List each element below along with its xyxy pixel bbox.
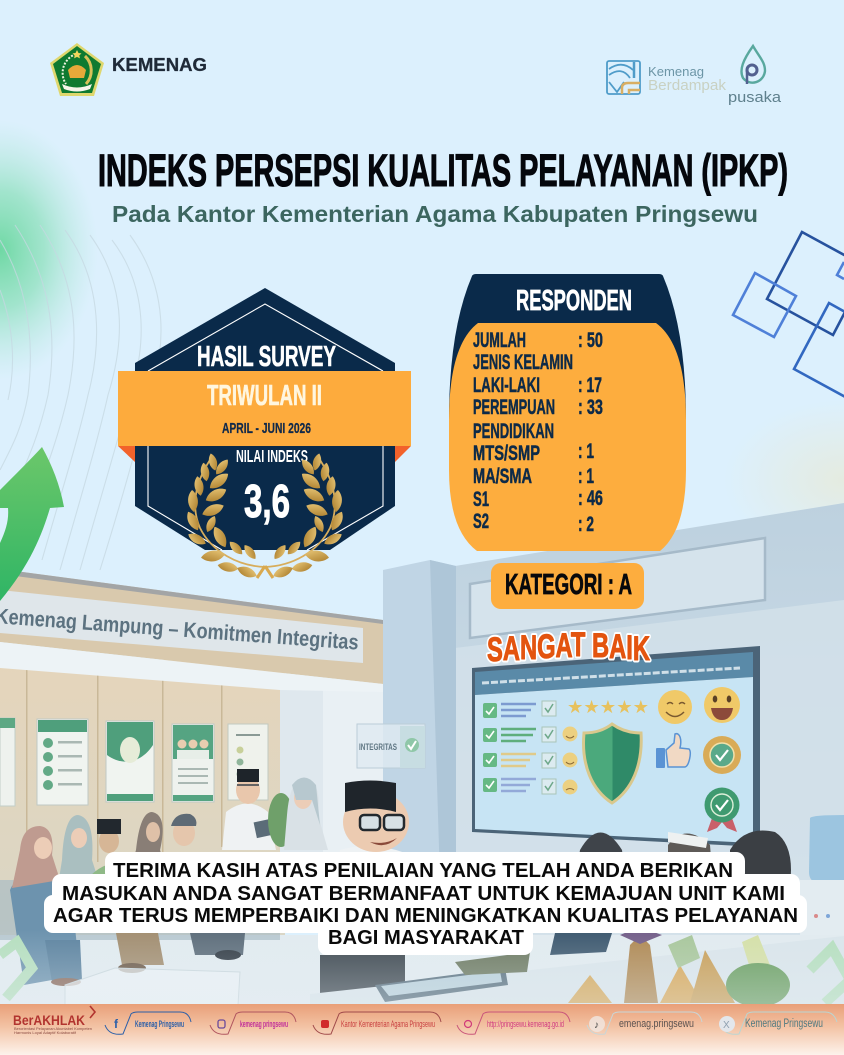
- social: instagram: kemenag pringsewu: [240, 1019, 288, 1030]
- floor: [0, 935, 844, 1005]
- stars: ★★★★★: [567, 697, 649, 717]
- respondent table: MTS/SMP: [473, 442, 540, 465]
- smileys: [562, 687, 740, 794]
- left room wall: [0, 660, 385, 960]
- illustration: office scene: [0, 503, 844, 1007]
- callout: sangat baik: SANGAT BAIK: [487, 626, 650, 669]
- integritas glass sign: INTEGRITAS: [359, 742, 397, 752]
- respondent table: JENIS KELAMIN: [473, 351, 573, 374]
- social: youtube: Kantor Kementerian Agama Pringsewu: [341, 1019, 435, 1030]
- green frame ornaments: [0, 942, 844, 1003]
- callout: kategori: [491, 563, 644, 609]
- right building: [383, 503, 844, 1005]
- logo: Pusaka: pusaka: [728, 89, 782, 106]
- icon: shield: [584, 724, 641, 803]
- wordmark: Kemenag: [648, 64, 704, 79]
- message text: MASUKAN ANDA SANGAT BERMANFAAT UNTUK KEMAJUAN UNIT KAMI: [62, 883, 785, 905]
- social: facebook: f: [114, 1017, 119, 1031]
- respondent table: : 1: [578, 440, 594, 463]
- navy header shape: [449, 274, 686, 420]
- social: x: X: [723, 1020, 730, 1031]
- lampung miniature: [568, 924, 790, 1007]
- period: APRIL - JUNI 2026: [222, 420, 311, 437]
- icon: thumb up: [656, 734, 690, 768]
- officers: [222, 769, 328, 850]
- logo: BerAKHLAK: BerAKHLAK: [13, 1012, 85, 1028]
- hexagon: [135, 288, 395, 550]
- logo: Pusaka: [728, 46, 782, 106]
- integritas glass sign: [357, 724, 425, 768]
- icon: green arrow: [0, 447, 64, 601]
- message text: [53, 860, 798, 949]
- social: website: [457, 1012, 570, 1034]
- waiting people: [0, 812, 280, 986]
- logo: BerAKHLAK: Harmonis Loyal Adaptif Kolaboratif: [14, 1031, 76, 1035]
- laurel wreath: [184, 452, 346, 580]
- message text: AGAR TERUS MEMPERBAIKI DAN MENINGKATKAN KUALITAS PELAYANAN: [53, 905, 798, 927]
- respondent table: S1: [473, 488, 489, 511]
- footer: [0, 1004, 844, 1055]
- ribbon: [118, 371, 411, 446]
- respondent table: : 2: [578, 513, 594, 536]
- service counter: [310, 936, 844, 1005]
- checklist rows: [483, 701, 556, 794]
- heading: hasil survey: HASIL SURVEY: [197, 341, 336, 373]
- panel: responden: [449, 274, 686, 551]
- seated staff: [455, 830, 791, 975]
- inner outline: [148, 304, 383, 550]
- logo: Kemenag Berdampak: Berdampak: [648, 78, 727, 94]
- respondent table: : 33: [578, 396, 603, 419]
- ceiling and sign: Kemenag Lampung – Komitmen Integritas: [0, 604, 359, 655]
- respondent table: JUMLAH: [473, 329, 526, 352]
- panel: hasil survey badge: [118, 288, 411, 580]
- callout: kategori: KATEGORI : A: [505, 569, 632, 601]
- respondent table: S2: [473, 510, 489, 533]
- social: tiktok: [587, 1012, 702, 1034]
- icon: gold badge: [703, 736, 741, 774]
- social: tiktok: ♪: [594, 1020, 599, 1031]
- ribbon title: TRIWULAN II: [207, 380, 322, 412]
- logo: BerAKHLAK: Berorientasi Pelayanan Akuntabel Kompeten: [14, 1027, 92, 1031]
- social: website: http://pringsewu.kemenag.go.id: [487, 1019, 564, 1030]
- social: instagram: [210, 1012, 296, 1034]
- social: tiktok: emenag.pringsewu: [619, 1018, 694, 1030]
- white backing: [44, 852, 807, 955]
- message text: TERIMA KASIH ATAS PENILAIAN YANG TELAH ANDA BERIKAN: [113, 860, 733, 882]
- logo: Kemenag Berdampak: [607, 61, 727, 94]
- index value: 3,6: [244, 475, 290, 527]
- posters: [0, 718, 268, 806]
- respondent table: MA/SMA: [473, 465, 532, 488]
- callout: sangat baik: SANGAT BAIK: [487, 626, 650, 669]
- decorative squares: [733, 232, 844, 405]
- logo: BerAKHLAK: [13, 1006, 95, 1035]
- respondent table: LAKI-LAKI: [473, 374, 540, 397]
- social: x: [719, 1012, 837, 1034]
- glass box: [65, 968, 240, 1005]
- main officer: [320, 780, 420, 995]
- respondent table: PEREMPUAN: [473, 396, 555, 419]
- social: youtube: [313, 1012, 441, 1034]
- heading: responden: RESPONDEN: [516, 285, 632, 317]
- kemenag wordmark: KEMENAG: [112, 55, 207, 75]
- respondent table: PENDIDIKAN: [473, 420, 554, 443]
- decorative curved lines: [0, 225, 161, 570]
- respondent table: : 46: [578, 487, 603, 510]
- icon: green ribbon badge: [704, 788, 740, 832]
- social: facebook: [105, 1012, 191, 1034]
- respondent table: [473, 329, 603, 536]
- orange body: [449, 323, 686, 551]
- water cooler: [800, 815, 844, 950]
- respondent table: : 50: [578, 329, 603, 352]
- message text: BAGI MASYARAKAT: [328, 927, 524, 949]
- respondent table: : 1: [578, 465, 594, 488]
- social: facebook: Kemenag Pringsewu: [135, 1019, 184, 1030]
- ribbon folds: [118, 446, 411, 462]
- nilai indeks label: NILAI INDEKS: [236, 446, 308, 466]
- ceiling and sign: [0, 569, 383, 692]
- screen: [472, 646, 760, 847]
- logo: Kemenag: [50, 43, 207, 96]
- thank-you message: [44, 852, 807, 955]
- subtitle: Pada Kantor Kementerian Agama Kabupaten Pringsewu: [112, 201, 758, 227]
- scene fade: [0, 930, 844, 1005]
- respondent table: : 17: [578, 374, 602, 397]
